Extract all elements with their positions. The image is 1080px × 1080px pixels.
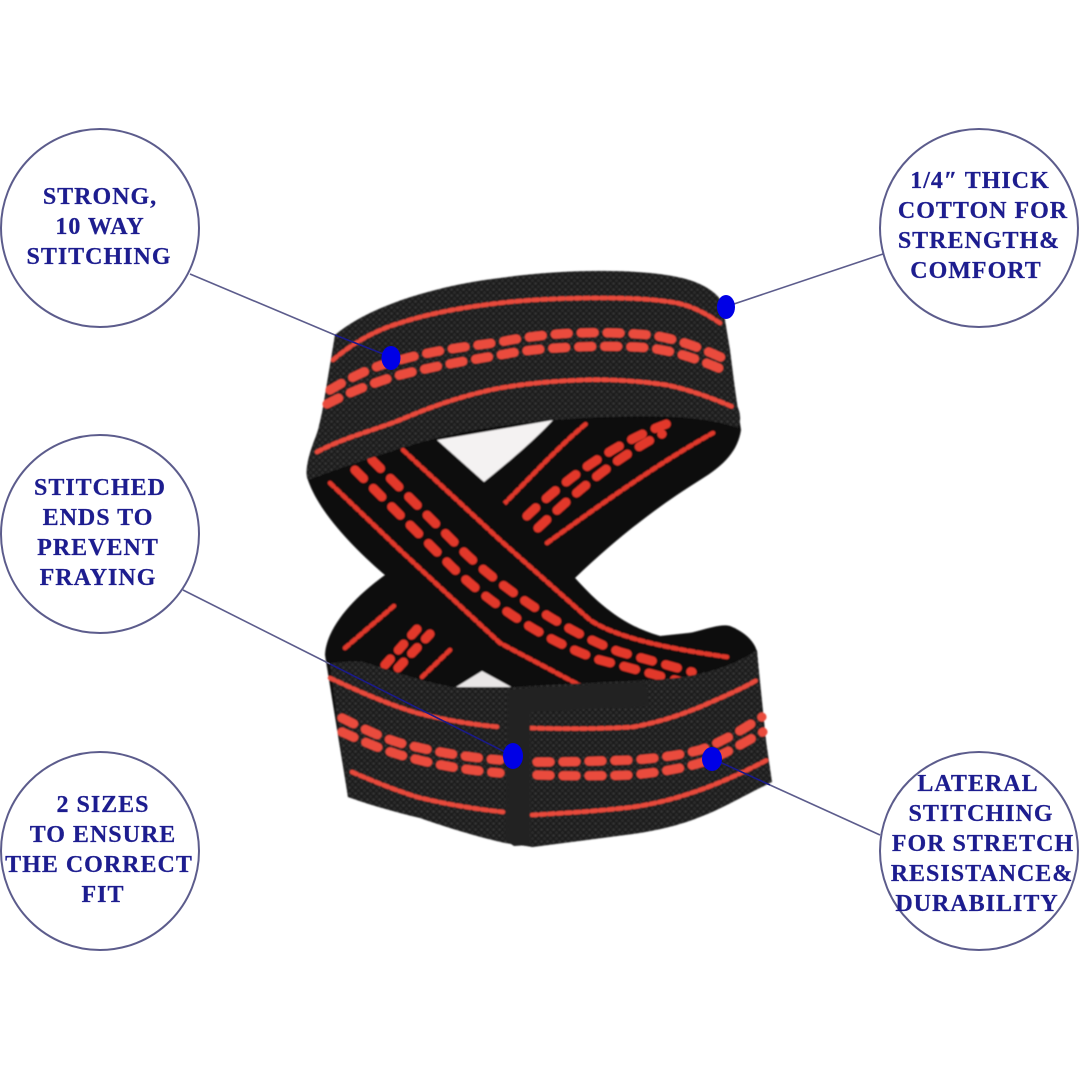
top band center double stitch [327,333,728,404]
product: figure-eight lifting strap [307,271,772,847]
callout: thick cotton: 1/4″ THICK [910,168,1050,194]
marker dots [382,295,735,771]
callout: stitched ends: PREVENT [37,535,159,561]
callout: thick cotton: COTTON FOR [898,198,1068,224]
white gap lower [456,671,513,688]
bottom band center double stitch [342,717,763,776]
strap rear silhouette [307,302,770,847]
callout: stitched ends [1,435,199,633]
callout: two sizes: FIT [81,882,125,908]
callout: two sizes: TO ENSURE [30,822,176,848]
callout: strong stitching: 10 WAY [55,214,145,240]
callout: stitched ends: STITCHED [34,475,166,501]
callout: lateral stitching: STITCHING [908,801,1054,827]
top band lower stitch [317,380,733,452]
bottom band upper stitch [330,678,500,727]
rear stitching right [503,422,713,543]
callout: lateral stitching: RESISTANCE& [891,861,1073,887]
callout: strong stitching: STRONG, [43,184,157,210]
callout: strong stitching [1,129,199,327]
callout: lateral stitching: LATERAL [917,771,1039,797]
top front band [307,271,740,480]
callout: stitched ends: FRAYING [40,565,156,591]
callout: stitched ends: ENDS TO [43,505,153,531]
bottom front band [330,650,772,847]
callout: two sizes: THE CORRECT [5,852,193,878]
white gap upper [437,420,553,482]
bottom band lower stitch [352,772,503,812]
stitched end flap [505,682,650,846]
callout: lateral stitching: FOR STRETCH [892,831,1074,857]
diagonal strap section [308,440,752,705]
callout: lateral stitching [880,752,1078,950]
top band upper stitch [333,298,720,360]
leader lines [183,254,883,835]
callout: strong stitching: STITCHING [26,244,172,270]
callout: two sizes: 2 SIZES [56,792,150,818]
callout: thick cotton [880,129,1078,327]
callout: thick cotton: COMFORT [910,258,1042,284]
rear stitching left [345,605,450,677]
callout: thick cotton: STRENGTH& [898,228,1060,254]
callout: two sizes [1,752,199,950]
callout: lateral stitching: DURABILITY [895,891,1059,917]
